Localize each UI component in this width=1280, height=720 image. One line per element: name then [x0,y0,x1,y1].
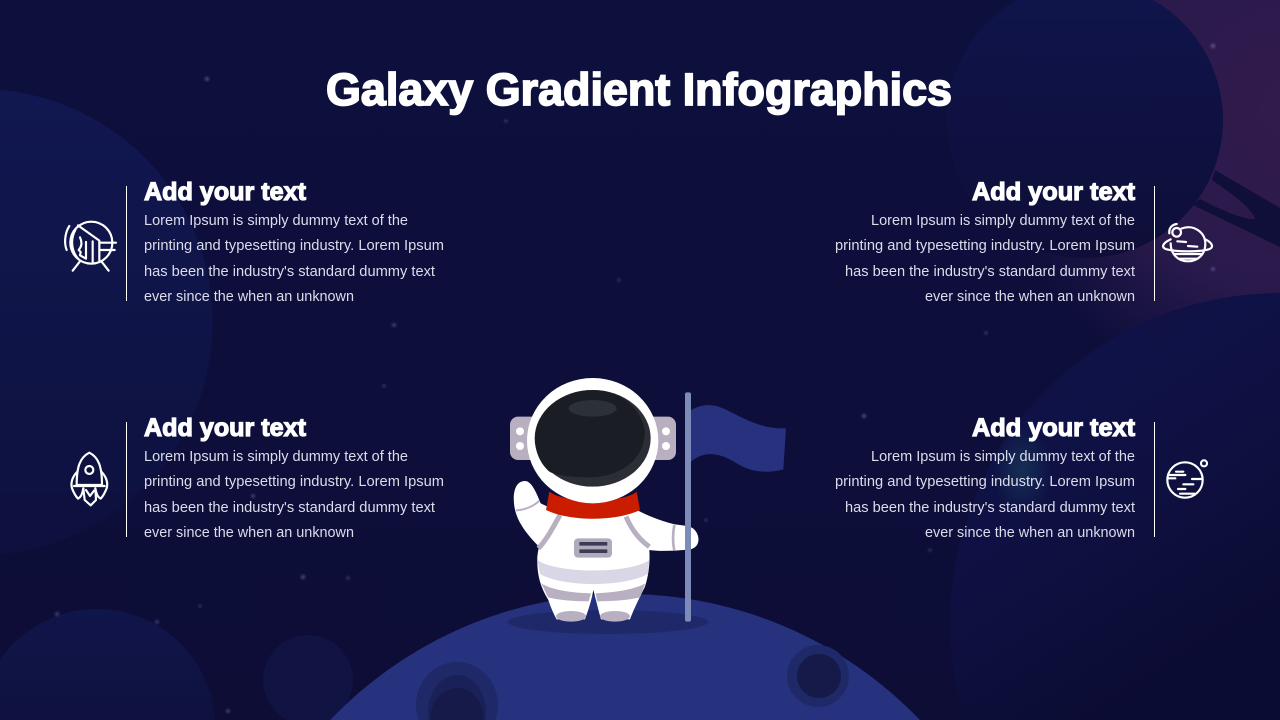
heading: Add your text [972,414,1136,442]
body text [835,213,1135,305]
body text: ever since the when an unknown [144,289,354,305]
title: Galaxy Gradient Infographics [326,64,952,115]
divider [1154,422,1155,537]
body text: printing and typesetting industry. Lorem Ipsum [835,474,1135,490]
icon: rocket [72,453,107,505]
planet bottom left [0,609,215,720]
divider [126,422,127,537]
crater right [787,645,849,707]
small planet bottom [263,635,353,720]
ringed planet top right [947,0,1280,258]
block: top right [835,178,1155,305]
flag pole [685,392,691,622]
helmet [527,378,658,503]
body [537,510,698,619]
block: top left [126,178,444,305]
block: bottom left [126,414,444,541]
helmet side pieces [510,417,676,460]
ground shadow [508,610,708,634]
body text: Lorem Ipsum is simply dummy text of the [144,213,408,229]
flag [691,405,786,472]
teal glow [992,426,1052,514]
body text: ever since the when an unknown [144,525,354,541]
heading: Add your text [144,178,307,206]
body text: printing and typesetting industry. Lorem Ipsum [144,238,444,254]
raised arm [514,481,562,546]
chest panel [574,538,612,558]
body text: printing and typesetting industry. Lorem Ipsum [144,474,444,490]
red scarf [546,492,640,519]
body text: printing and typesetting industry. Lorem Ipsum [835,238,1135,254]
crater left [416,662,498,720]
body text: has been the industry's standard dummy text [845,500,1135,516]
icon: ringed planet [1163,224,1212,261]
body text: has been the industry's standard dummy text [144,500,435,516]
body text [835,449,1135,541]
heading: Add your text [144,414,307,442]
body text: Lorem Ipsum is simply dummy text of the [871,213,1135,229]
body text [144,449,444,541]
body text: ever since the when an unknown [925,525,1135,541]
block: bottom right [835,414,1155,541]
heading: Add your text [972,178,1136,206]
icon: astronaut helmet [65,222,116,271]
moon surface [330,594,920,720]
body text: Lorem Ipsum is simply dummy text of the [144,449,408,465]
divider [126,186,127,301]
astronaut with flag [510,378,786,622]
body text: ever since the when an unknown [925,289,1135,305]
body text [144,213,444,305]
body text: has been the industry's standard dummy text [144,264,435,280]
planet lower right [950,293,1280,720]
icon: planet with moon [1167,460,1207,498]
large planet left [0,90,213,554]
body text: has been the industry's standard dummy text [845,264,1135,280]
divider [1154,186,1155,301]
suit details [516,501,674,622]
body text: Lorem Ipsum is simply dummy text of the [871,449,1135,465]
